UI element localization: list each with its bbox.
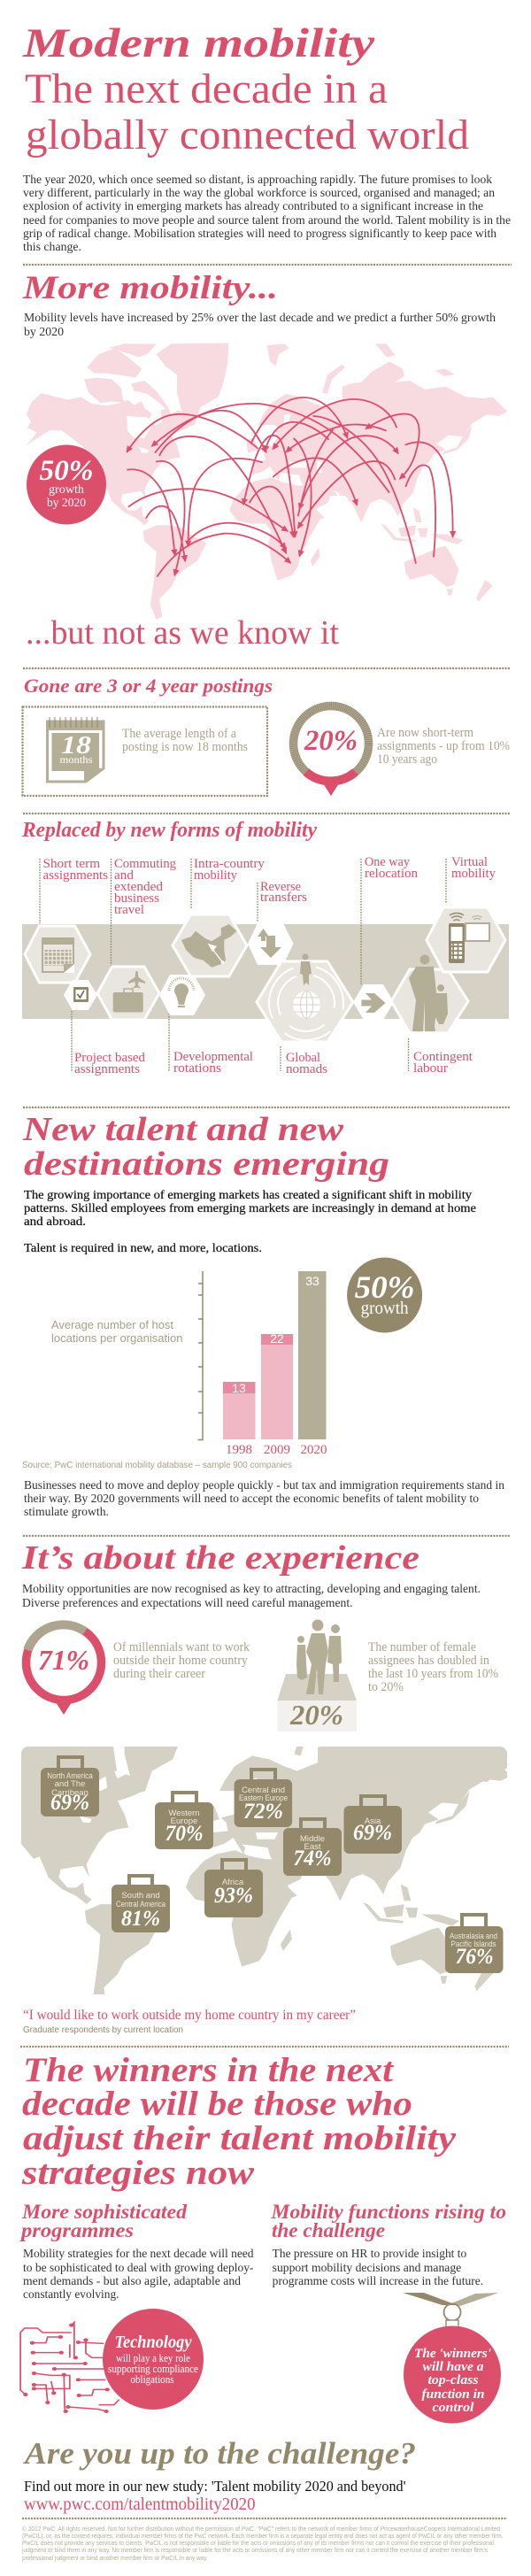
text: mobility levels: by 2020 [24, 325, 64, 338]
suitcase: South and Central America [112, 1876, 170, 1932]
icon: suitcase and plane hexagon [97, 967, 159, 1020]
chart axis label: locations per organisation [51, 1331, 182, 1345]
callout: 50% growth: growth [49, 483, 84, 497]
icon: calendar: 18 [61, 732, 91, 760]
heading: are you up to the challenge: Are you up to the challenge? [23, 2436, 416, 2471]
heading: but not as we know it: ...but not as we know it [26, 614, 339, 652]
heading: winners: strategies now [21, 2154, 255, 2192]
diagram: forms of mobility [22, 855, 509, 1076]
legal text [21, 2525, 503, 2562]
label: intra-country [194, 857, 266, 883]
suitcase: Central and Eastern Europe: Eastern Europe [239, 1793, 288, 1803]
text: short-term assignments [377, 726, 510, 767]
suitcase: Middle East: 74% [294, 1847, 331, 1870]
label: commuting: Commuting [114, 857, 176, 871]
background band [22, 924, 509, 1019]
text: female assignees: The number of female [368, 1640, 476, 1654]
body text: The pressure on HR to provide insight to [273, 2247, 467, 2260]
callout: winners medal [403, 2293, 501, 2424]
label: global nomads: nomads [286, 1062, 327, 1076]
callout: winners medal: function in [421, 2387, 485, 2402]
chart: 71% ring: 71% [38, 1644, 89, 1676]
icon: contingent workers hexagon [391, 954, 468, 1033]
label: project based [74, 1051, 146, 1076]
heading: new talent [22, 1111, 389, 1183]
text: mobility levels [24, 311, 496, 338]
callout: winners medal: will have a [423, 2360, 484, 2374]
suitcase: South and Central America: South and [121, 1891, 160, 1901]
quote: “I would like to work outside my home country in my career” [23, 2008, 356, 2023]
subheading [270, 2201, 506, 2241]
bar: 2020: 33 [305, 1274, 319, 1288]
body text: support mobility decisions and manage [273, 2261, 461, 2274]
callout: winners medal: top-class [428, 2373, 479, 2387]
bar: 2009: 22 [270, 1331, 284, 1346]
icon: women on podium [278, 1620, 357, 1731]
text: businesses: Businesses need to move and deploy people quickly - but tax and immigration requirements stand in [24, 1478, 504, 1492]
suitcase: Western Europe: 70% [165, 1822, 204, 1846]
panel: mobility functions [270, 2201, 506, 2287]
text: businesses: stimulate growth. [24, 1505, 109, 1518]
suitcase: North America: Carribean [51, 1788, 88, 1798]
label: project based: assignments [74, 1062, 140, 1076]
bar: 2009 [261, 1331, 293, 1457]
text: mobility levels: Mobility levels have increased by 25% over the last decade and we predict a further 50% growth [24, 311, 496, 324]
text: emerging markets [24, 1188, 476, 1254]
callout: technology: obligations [131, 2372, 173, 2386]
suitcase: Middle East: East [304, 1842, 321, 1852]
heading: gone are postings: Gone are 3 or 4 year postings [24, 675, 273, 697]
subheading: the challenge [272, 2219, 385, 2241]
suitcase: Middle East [283, 1819, 342, 1876]
heading: new talent: New talent and new [22, 1111, 344, 1148]
label: developmental rotations [173, 1050, 253, 1076]
callout: 50% growth: 50% [39, 455, 94, 487]
label: global nomads [286, 1051, 327, 1076]
suitcase: Asia: Asia [365, 1816, 381, 1826]
text: short-term assignments: 10 years ago [377, 752, 437, 767]
suitcase: Central and Eastern Europe: Central and [242, 1785, 285, 1795]
label: virtual mobility: mobility [451, 867, 496, 881]
suitcase: Western Europe: Western [168, 1809, 200, 1818]
label: commuting: extended [114, 880, 164, 894]
intro text: very different, particularly in the way the global workforce is sourced, organised and managed; an [23, 186, 495, 199]
intro text: explosion of activity in emerging markets has already contributed to a significant increase in the [23, 199, 483, 212]
subheading: More sophisticated [21, 2201, 188, 2223]
text: female assignees: to 20% [368, 1680, 404, 1694]
chart axis label [51, 1318, 182, 1345]
icon: phone and tablet hexagon [427, 907, 505, 972]
text: emerging markets: The growing importance of emerging markets has created a significant shift in mobility [24, 1188, 472, 1201]
text: emerging markets: Talent is required in new, and more, locations. [24, 1241, 262, 1254]
callout: 50% growth: growth [361, 1299, 409, 1318]
label: global nomads: Global [286, 1051, 320, 1065]
label: one way relocation: One way [365, 855, 411, 869]
intro text: this change. [23, 240, 81, 253]
bar: 1998 [223, 1381, 255, 1457]
suitcase: Australasia and Pacific Islands [445, 1915, 503, 1973]
suitcase: Australasia and Pacific Islands: Australasia and [450, 1932, 497, 1941]
icon: China map hexagon [173, 914, 247, 976]
heading: winners: The winners in the next [23, 2051, 394, 2089]
text: millennials: outside their home country [113, 1654, 249, 1668]
callout: winners medal: The 'winners' [414, 2347, 491, 2361]
suitcase: Australasia and Pacific Islands: Pacific Islands [451, 1940, 496, 1949]
body text [273, 2247, 483, 2287]
bar: 2009: 2009 [264, 1443, 290, 1457]
icon: circuit lines [20, 2322, 119, 2413]
quote source: Graduate respondents by current location [23, 2025, 183, 2035]
suitcase: Middle East: Middle [300, 1834, 325, 1844]
label: contingent labour: Contingent [413, 1050, 473, 1064]
title: Modern mobility [22, 20, 374, 66]
label: short term assignments [42, 857, 108, 883]
heading: replaced by new forms: Replaced by new forms of mobility [21, 819, 317, 842]
bar chart: host locations [51, 1271, 327, 1457]
dotted connectors [40, 859, 446, 1071]
body text: constantly evolving. [23, 2287, 119, 2301]
suitcase: Africa: 93% [214, 1884, 253, 1908]
label: project based: Project based [74, 1051, 146, 1065]
text: average length: posting is now 18 months [122, 740, 248, 754]
heading: winners: decade will be those who [22, 2085, 412, 2123]
chart axis label: Average number of host [51, 1318, 173, 1331]
text: businesses [24, 1478, 504, 1518]
link text: www.pwc.com/talentmobility2020 [24, 2495, 255, 2514]
suitcase: Western Europe: Europe [171, 1816, 197, 1826]
chart: 20% ring [294, 706, 368, 796]
callout: 50% growth: by 2020 [47, 497, 86, 510]
callout: 50% growth [347, 1257, 422, 1333]
legal text: professional judgment or bind another member firm or PwCIL in any way. [22, 2554, 208, 2562]
world map with migration arrows [26, 343, 507, 620]
label: developmental rotations: Developmental [173, 1050, 253, 1064]
icon: women on podium: 20% [289, 1699, 343, 1731]
intro text: grip of radical change. Mobilisation strategies will need to progress significantly to keep pace with [23, 227, 496, 240]
suitcase: North America [41, 1757, 99, 1816]
icon: checkbox hexagon [64, 980, 97, 1010]
intro text: need for companies to move people and source talent from around the world. Talent mobility is in the [23, 213, 511, 227]
heading: new talent: destinations emerging [24, 1145, 389, 1183]
title: globally connected world [26, 112, 469, 158]
body text: Mobility strategies for the next decade will need [23, 2247, 254, 2260]
body text: programme costs will increase in the future. [273, 2274, 483, 2287]
icon: arrow hexagon [353, 984, 394, 1020]
chart: 71% ring [27, 1624, 101, 1715]
text: short-term assignments: assignments - up from 10% [377, 739, 510, 753]
label: developmental rotations: rotations [173, 1061, 221, 1076]
chart: 20% ring: 20% [304, 725, 358, 757]
label: commuting: and [114, 868, 135, 883]
text: millennials: Of millennials want to work [113, 1640, 250, 1654]
text: millennials: during their career [113, 1667, 205, 1681]
suitcase: Asia: 69% [353, 1821, 392, 1845]
text: average length: The average length of a [122, 727, 237, 741]
text: average length [122, 727, 248, 754]
body text: to be sophisticated to deal with growing deploy- [23, 2261, 253, 2274]
bar: 2020: 2020 [301, 1443, 327, 1457]
suitcase: South and Central America: 81% [121, 1907, 160, 1931]
callout: technology: Technology [115, 2333, 192, 2352]
heading: winners: adjust their talent mobility [23, 2119, 457, 2157]
suitcase: Asia [343, 1796, 402, 1854]
text: female assignees: the last 10 years from 10% [368, 1667, 498, 1681]
text: businesses: their way. By 2020 governments will need to accept the economic benefits of talent mobility to [24, 1492, 479, 1505]
text: short-term assignments: Are now short-term [377, 726, 474, 740]
suitcase: North America: and The [55, 1779, 85, 1789]
text: millennials [113, 1640, 250, 1681]
bar: 1998: 1998 [226, 1443, 252, 1457]
label: virtual mobility [451, 855, 496, 881]
label: reverse transfers: Reverse [260, 880, 301, 894]
text: mobility opportunities [22, 1582, 481, 1609]
axis [198, 1271, 203, 1439]
icon: calendar [47, 717, 104, 782]
icon: globe hexagon [257, 953, 353, 1042]
text: emerging markets: patterns. Skilled employees from emerging markets are increasingly in demand at home [24, 1201, 476, 1215]
icon: calendar hexagon [25, 926, 90, 983]
text: find out more: Find out more in our new study: 'Talent mobility 2020 and beyond' [24, 2478, 406, 2495]
suitcase: North America: 69% [50, 1791, 89, 1815]
callout: technology: supporting compliance [108, 2362, 198, 2375]
heading: winners [21, 2051, 457, 2192]
callout: technology: will play a key role [116, 2351, 190, 2364]
label: short term assignments: Short term [42, 857, 101, 871]
text: female assignees: assignees has doubled in [368, 1654, 490, 1668]
callout: 50% growth [27, 444, 106, 524]
icon: reverse arrows hexagon [248, 923, 294, 965]
subheading: Mobility functions rising to [270, 2201, 506, 2223]
callout: technology [103, 2309, 204, 2410]
body text: ment demands - but also agile, adaptable and [23, 2274, 241, 2287]
label: virtual mobility: Virtual [451, 855, 488, 869]
suitcase: South and Central America: Central America [116, 1900, 166, 1909]
title: The next decade in a [25, 66, 388, 112]
suitcase: Africa: Africa [222, 1878, 244, 1887]
world map with suitcases [21, 1747, 507, 1994]
callout: winners medal: control [432, 2401, 474, 2415]
label: one way relocation [365, 855, 419, 881]
suitcase: Western Europe [155, 1793, 213, 1849]
text: mobility opportunities: Mobility opportunities are now recognised as key to attracting, developing and engaging talent. [22, 1582, 481, 1595]
heading: more mobility: More mobility... [22, 270, 278, 306]
label: intra-country: mobility [194, 868, 238, 883]
heading: experience: It’s about the experience [21, 1539, 419, 1577]
subheading: programmes [19, 2219, 134, 2241]
label: intra-country: Intra-country [194, 857, 266, 871]
suitcase: Australasia and Pacific Islands: 76% [455, 1945, 494, 1969]
suitcase: Central and Eastern Europe [235, 1770, 292, 1827]
callout: 50% growth: 50% [355, 1269, 415, 1305]
subheading [19, 2201, 188, 2241]
suitcase: Africa [204, 1860, 263, 1917]
text: mobility opportunities: Diverse preferences and expectations will need careful management. [22, 1596, 352, 1609]
body text [23, 2247, 254, 2301]
suitcase: North America: North America [47, 1771, 93, 1781]
label: contingent labour: labour [413, 1061, 448, 1076]
panel: more sophisticated programmes [19, 2201, 254, 2301]
title [22, 20, 469, 158]
label: reverse transfers [260, 880, 307, 905]
text: emerging markets: and abroad. [24, 1215, 86, 1228]
icon: light bulb hexagon [159, 975, 205, 1015]
icon: calendar: months [60, 753, 93, 766]
suitcase: Central and Eastern Europe: 72% [243, 1800, 283, 1824]
bar: 2020 [298, 1271, 327, 1457]
label: commuting: business [114, 891, 159, 906]
label: commuting: travel [114, 903, 144, 917]
label: short term assignments: assignments [42, 868, 108, 883]
bar: 1998: 13 [232, 1381, 246, 1395]
chart source: Source: PwC international mobility database – sample 900 companies [22, 1460, 292, 1470]
panel: 18 months posting [23, 706, 267, 796]
label: one way relocation: relocation [365, 867, 419, 881]
label: commuting [114, 857, 176, 917]
intro text: The year 2020, which once seemed so distant, is approaching rapidly. The future promises to look [23, 173, 492, 186]
text: female assignees [368, 1640, 498, 1694]
label: reverse transfers: transfers [260, 891, 307, 905]
label: contingent labour [413, 1050, 473, 1076]
intro text [23, 173, 511, 253]
